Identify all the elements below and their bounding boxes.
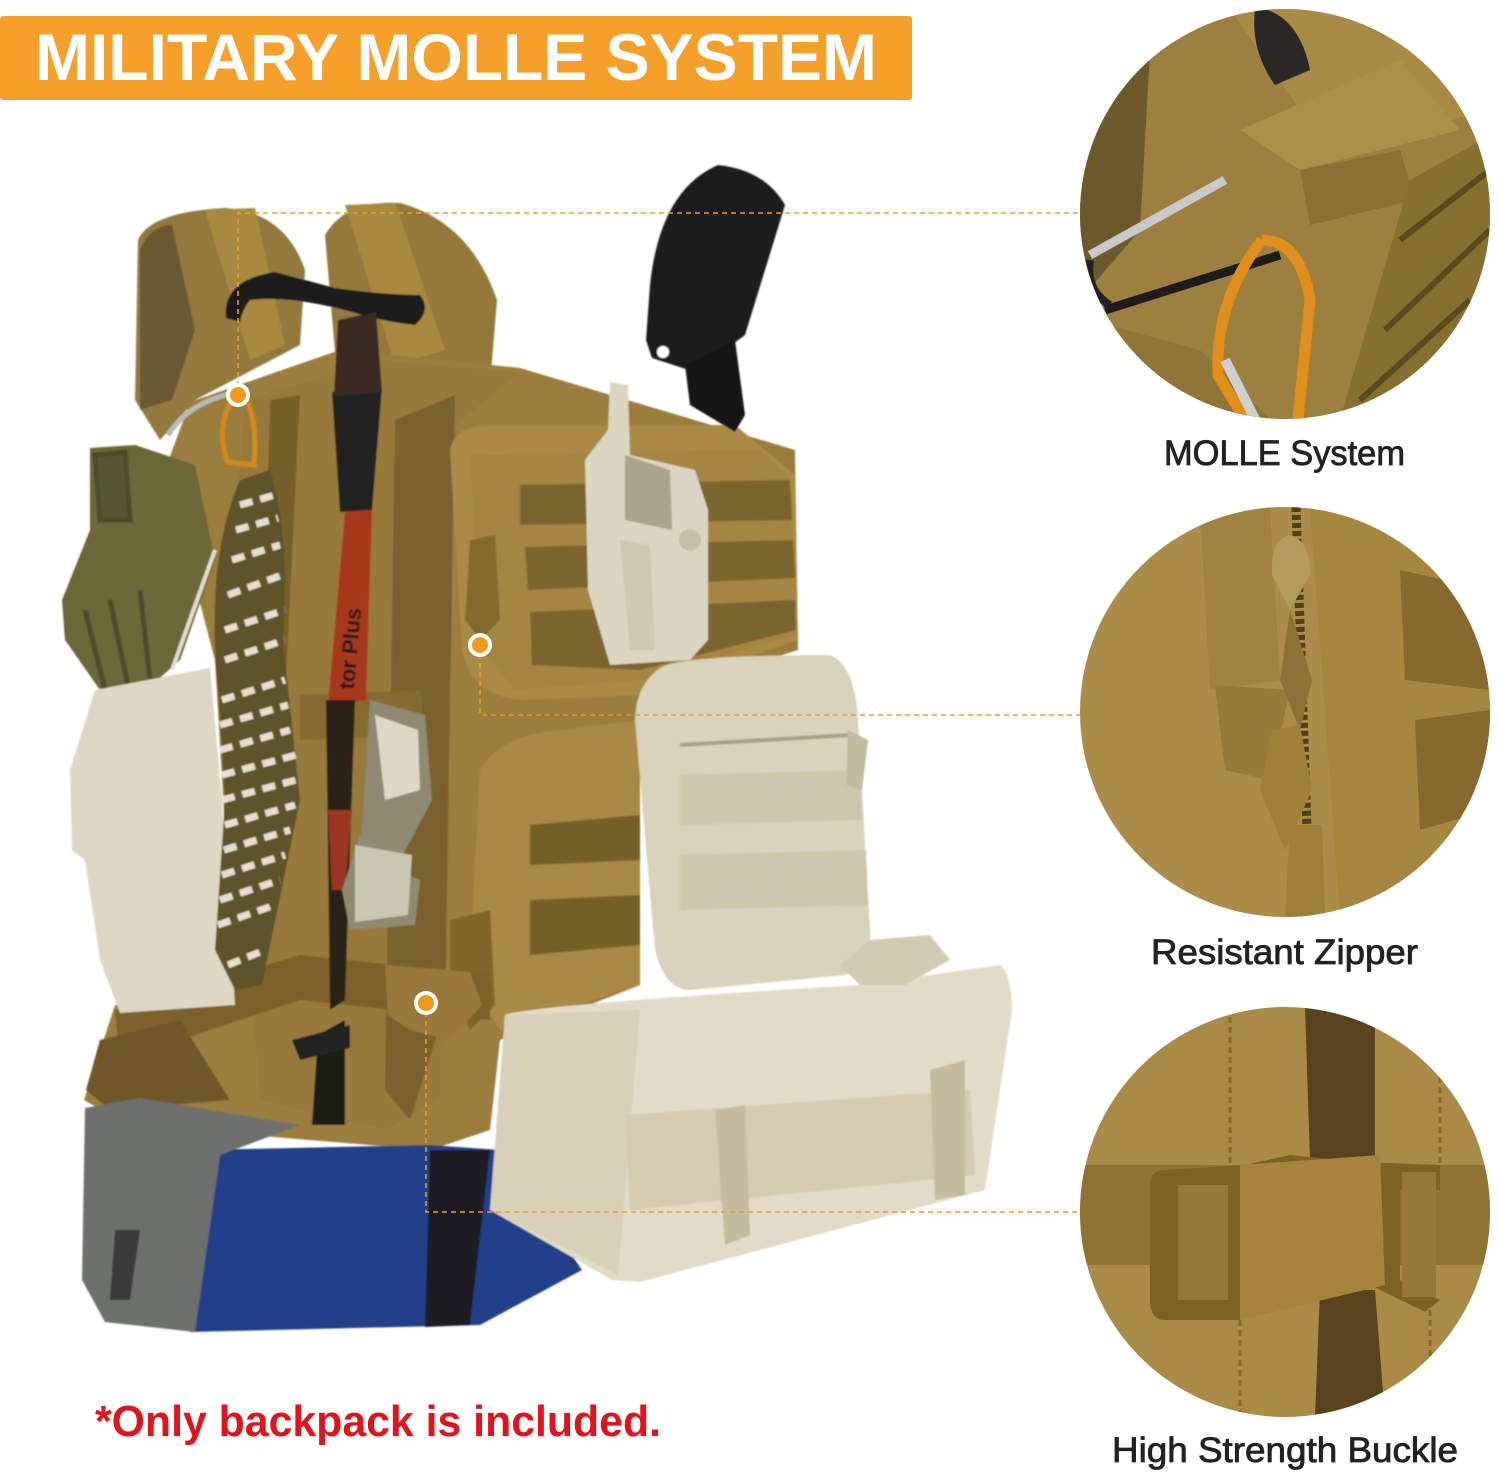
- pale organizer pouch: [635, 655, 870, 990]
- marker dot: zipper: [470, 635, 490, 655]
- waist strap and buckle: [86, 690, 490, 1110]
- lower front pocket: [450, 720, 640, 1030]
- tent bag: blue and grey: [82, 1098, 582, 1332]
- shovel: [646, 165, 785, 432]
- label: MOLLE System: MOLLE System: [1164, 434, 1405, 473]
- dashed leader: zipper: [480, 645, 1080, 715]
- marker dot: buckle: [416, 993, 436, 1013]
- detail circle: high strength buckle: [1080, 1007, 1490, 1417]
- trekking pole: tor Plus: [334, 607, 366, 690]
- note: only backpack included: *Only backpack is included.: [95, 1397, 661, 1446]
- carabiners: [168, 392, 255, 465]
- marker dot: MOLLE: [228, 385, 248, 405]
- dashed leader: buckle: [426, 1003, 1080, 1212]
- backpack with attached gear: [62, 165, 1012, 1332]
- safety glasses: [342, 700, 432, 930]
- paracord rope: [172, 470, 300, 990]
- detail circle: resistant zipper: [1080, 507, 1490, 917]
- gloves: [62, 445, 215, 700]
- title banner: MILITARY MOLLE SYSTEM: [35, 20, 877, 94]
- main pack body: [84, 350, 798, 1150]
- shoulder straps: [135, 203, 497, 440]
- dashed leader: MOLLE system: [238, 213, 1078, 395]
- large pale pouch: [490, 935, 1012, 1282]
- detail circle: MOLLE system: [1080, 9, 1500, 419]
- label: Resistant Zipper: Resistant Zipper: [1151, 933, 1418, 972]
- trekking pole: [226, 272, 425, 1125]
- label: High Strength Buckle: High Strength Buckle: [1112, 1431, 1458, 1470]
- upper front pocket: [450, 425, 798, 700]
- pale side pouch: [70, 668, 235, 1013]
- radio pouch: [585, 382, 708, 665]
